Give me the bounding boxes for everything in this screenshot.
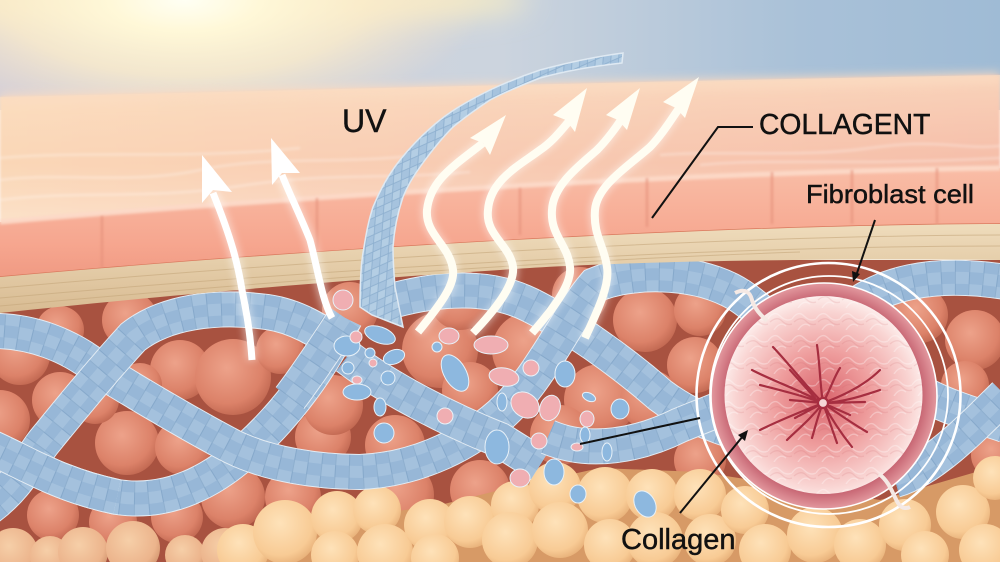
rope: broken right segment <box>548 405 730 446</box>
rope: right lower rising <box>895 395 1000 480</box>
leader: Fibroblast cell <box>852 220 875 282</box>
severed collagen fibre rising <box>360 53 623 327</box>
rope: right lower falling <box>925 395 1000 425</box>
label: Collagen: Collagen <box>621 524 735 556</box>
deep tissue background <box>0 260 1000 562</box>
leader: fragment to cell <box>580 418 700 444</box>
cell outer rings <box>696 263 960 527</box>
leader: Collagen <box>680 430 748 513</box>
rope: broken diagonal <box>347 357 540 465</box>
rope: long wave to right <box>0 274 790 472</box>
arrow 2 <box>271 138 332 318</box>
arrow 5 <box>532 88 640 333</box>
rope: right upper <box>850 278 1000 310</box>
arrow 1 <box>202 155 252 360</box>
rope: frayed end at break <box>290 318 345 398</box>
rope: back middle <box>395 290 730 430</box>
cell nucleus filaments <box>752 345 880 447</box>
skin top surface <box>0 75 1000 222</box>
skin surface wrinkles <box>0 144 1000 200</box>
UV heat arrows <box>202 77 699 360</box>
rope: left overlap piece <box>0 447 117 497</box>
leader: COLLAGENT <box>652 127 753 218</box>
label: UV: UV <box>342 103 387 139</box>
cell membrane <box>711 283 937 509</box>
ring clips <box>735 291 910 508</box>
label: COLLAGENT: COLLAGENT <box>759 108 930 140</box>
arrow 6 <box>585 77 699 338</box>
cell body <box>724 296 922 494</box>
arrow 4 <box>473 88 587 333</box>
label: Fibroblast cell: Fibroblast cell <box>806 179 974 209</box>
collagen fragments <box>333 290 661 521</box>
fat globules <box>0 456 1000 562</box>
collagen rope network <box>0 274 1000 510</box>
sky with sun <box>0 0 1000 120</box>
fibroblast cell <box>696 263 960 527</box>
rope: bottom curve rising to break <box>0 318 345 499</box>
skin block layers <box>0 75 1000 313</box>
skin front face <box>0 168 1000 277</box>
arrow 3 <box>418 115 506 332</box>
rope: rising left arc <box>0 309 345 510</box>
tan dermis band <box>0 224 1000 313</box>
